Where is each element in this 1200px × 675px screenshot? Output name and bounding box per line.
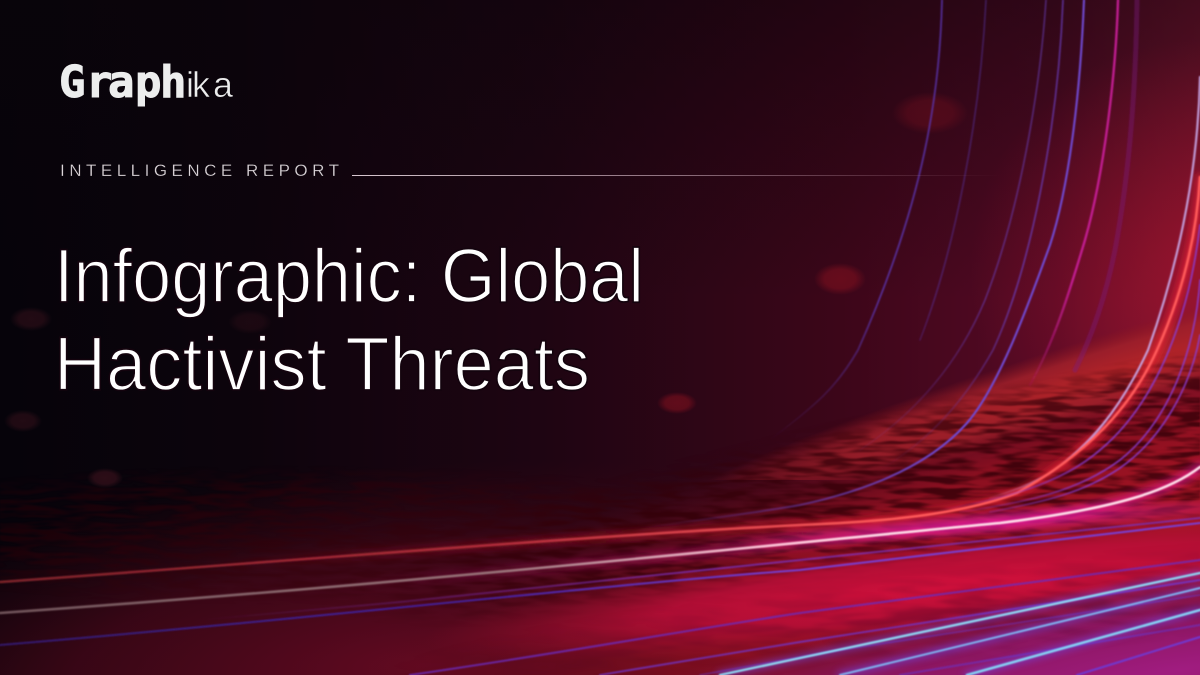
light trails: upper curved violet and magenta lines (640, 0, 1137, 528)
title: Infographic: Global (54, 234, 644, 319)
title: Hactivist Threats (54, 322, 590, 407)
divider rule (352, 175, 1000, 176)
logo: Graphika: Graph (59, 57, 186, 108)
background: bokeh spots (4, 92, 968, 488)
light trails: lower right purple fan (930, 225, 1200, 512)
logo: Graphika: ika (186, 64, 234, 105)
section label: Intelligence Report: INTELLIGENCE REPORT (60, 161, 339, 180)
background: rippled ground (0, 300, 1200, 675)
light trails: lower straight purple lines (0, 518, 1200, 675)
light trails: cyan lines (720, 573, 1200, 675)
light trails: main bright red and white arcs (0, 77, 1200, 613)
title (54, 234, 644, 407)
